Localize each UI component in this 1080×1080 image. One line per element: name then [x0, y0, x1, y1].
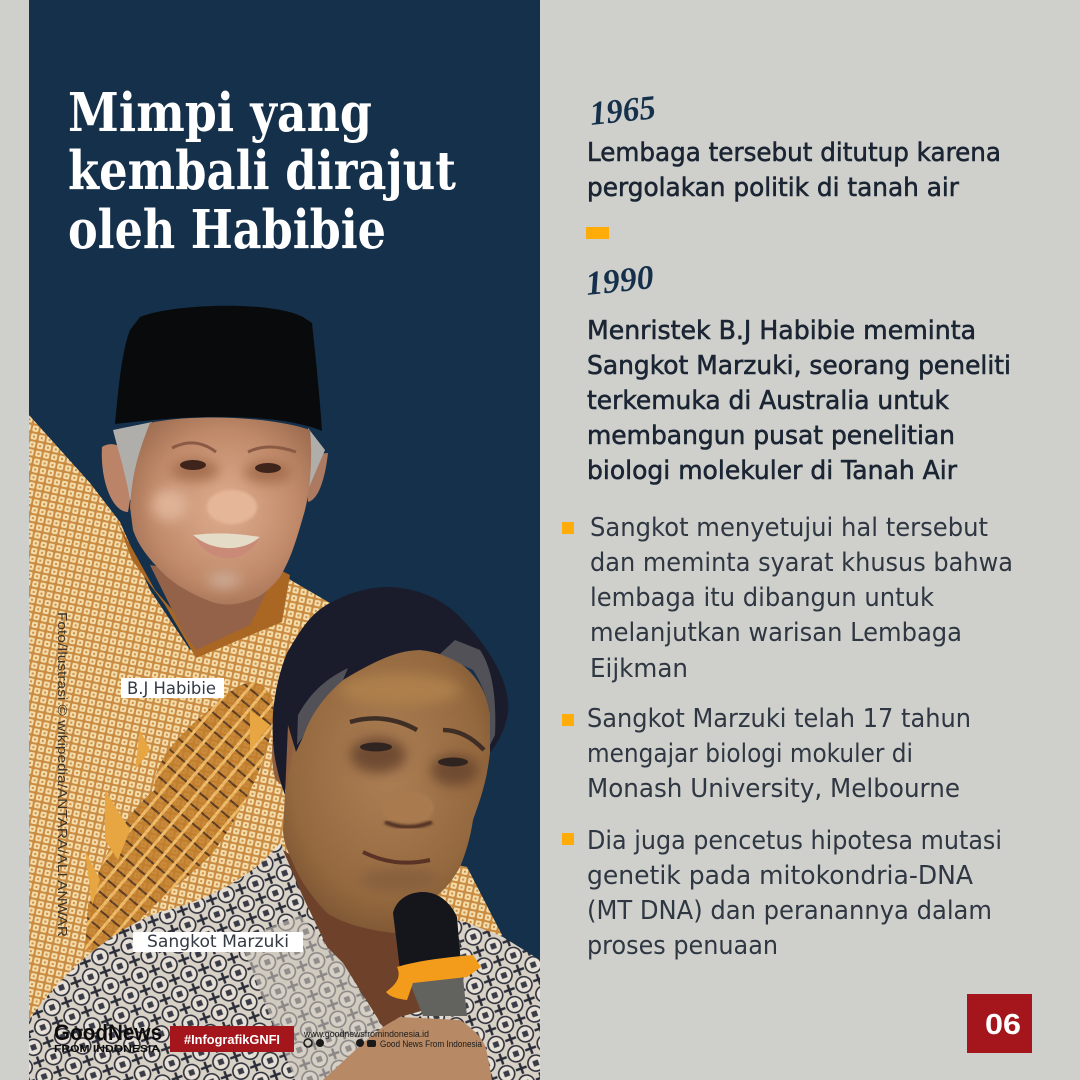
text block: 1990 description: membangun pusat penelitian — [587, 421, 955, 451]
year: 1965: 1965 — [588, 89, 657, 133]
footer branding — [54, 1024, 482, 1052]
marzuki face shading — [340, 674, 479, 892]
habibie nose — [207, 490, 257, 524]
photo: B.J Habibie — [29, 306, 502, 1020]
bullet 1 — [562, 513, 1013, 684]
title: oleh Habibie — [68, 199, 386, 261]
logo: GoodNews from Indonesia — [54, 1024, 162, 1052]
logo: GoodNews from Indonesia: GoodNews — [54, 1020, 162, 1045]
year: 1990: 1990 — [584, 259, 655, 303]
habibie neck — [150, 565, 270, 650]
bullet 2: mengajar biologi mokuler di — [587, 739, 913, 769]
bullet 3: proses penuaan — [587, 931, 778, 961]
bullet 1: lembaga itu dibangun untuk — [590, 583, 934, 613]
text block: 1990 description: Menristek B.J Habibie meminta — [587, 316, 976, 346]
text block: 1990 description: biologi molekuler di Tanah Air — [587, 456, 957, 486]
habibie shirt motif — [85, 682, 275, 950]
bullet 1: Sangkot menyetujui hal tersebut — [590, 513, 988, 543]
habibie face — [130, 418, 311, 604]
text block: 1990 description — [587, 316, 1011, 486]
hashtag badge — [170, 1026, 294, 1052]
bullet 2: Monash University, Melbourne — [587, 774, 960, 804]
bullet 1: melanjutkan warisan Lembaga — [590, 618, 962, 648]
page number badge: 06 — [985, 1009, 1021, 1041]
label: Sangkot Marzuki: Sangkot Marzuki — [147, 932, 289, 952]
page number badge — [967, 994, 1032, 1053]
bullet 1: dan meminta syarat khusus bahwa — [590, 548, 1013, 578]
habibie peci — [115, 306, 322, 431]
marzuki ear — [272, 726, 294, 789]
title: kembali dirajut — [68, 140, 456, 202]
microphone handle — [410, 977, 467, 1016]
marzuki gray temples — [297, 640, 495, 745]
title — [68, 82, 456, 261]
text block: 1965 description — [587, 138, 1001, 203]
habibie ears — [102, 444, 328, 512]
bullet 3: (MT DNA) dan peranannya dalam — [587, 896, 992, 926]
bullet 2: Sangkot Marzuki telah 17 tahun — [587, 704, 971, 734]
microphone orange ring — [386, 955, 481, 1000]
title: Mimpi yang — [68, 82, 372, 144]
marzuki hair — [273, 587, 508, 795]
timeline marker — [586, 227, 609, 239]
text block: 1990 description: Sangkot Marzuki, seorang peneliti — [587, 351, 1011, 381]
website address: www.goodnewsfromindonesia.id — [303, 1029, 429, 1039]
bullet 1: Eijkman — [590, 654, 688, 684]
label: B.J Habibie: B.J Habibie — [127, 679, 216, 699]
habibie hair — [113, 422, 325, 500]
habibie eyes and brows — [172, 443, 296, 473]
social handles: Good News From Indonesia — [380, 1039, 482, 1049]
bullet 2 — [562, 704, 971, 804]
marzuki neck — [283, 850, 460, 1027]
habibie face shading — [152, 459, 292, 588]
bullet 3: Dia juga pencetus hipotesa mutasi — [587, 826, 1002, 856]
microphone head — [393, 892, 462, 970]
bullet 3: genetik pada mitokondria-DNA — [587, 861, 973, 891]
panel: navy photo panel — [29, 0, 540, 1080]
chair behind — [29, 950, 90, 1015]
photo: Sangkot Marzuki — [29, 587, 540, 1080]
habibie collar — [118, 523, 290, 658]
logo: GoodNews from Indonesia: FROM INDONESIA — [54, 1044, 160, 1055]
hashtag badge: #InfografikGNFI — [184, 1032, 280, 1047]
social handles — [304, 1039, 482, 1049]
habibie smile — [193, 533, 260, 558]
marzuki eyes and brows — [350, 718, 484, 766]
photo credit: Foto/Ilustrasi © wikipedia/ANTARA/ALI ANWAR — [55, 612, 70, 937]
marzuki face — [283, 650, 490, 933]
marzuki hand — [323, 1017, 492, 1080]
text block: 1965 description: pergolakan politik di tanah air — [587, 173, 959, 203]
marzuki collar placket — [240, 915, 380, 1080]
bullet 3 — [562, 826, 1002, 961]
marzuki shirt — [29, 843, 540, 1080]
text block: 1990 description: terkemuka di Australia untuk — [587, 386, 949, 416]
text block: 1965 description: Lembaga tersebut ditutup karena — [587, 138, 1001, 168]
habibie batik shirt — [29, 415, 502, 1020]
marzuki nose — [383, 801, 434, 828]
marzuki mouth — [363, 852, 430, 863]
